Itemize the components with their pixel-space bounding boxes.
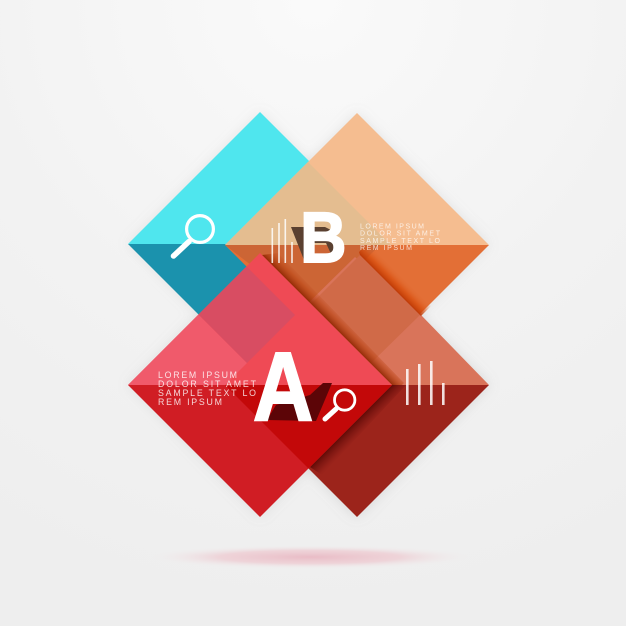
light left facet (128, 314, 247, 385)
floor shadow (145, 545, 475, 569)
panel: orange diamond (225, 113, 489, 377)
panel: dark red diamond (225, 245, 489, 517)
text block: top right: SAMPLE TEXT LO (360, 238, 441, 245)
shadow on upper right (262, 253, 404, 385)
text block: top right: LOREM IPSUM (360, 224, 424, 230)
text block: top right (360, 224, 441, 252)
deep red overlap (225, 385, 392, 468)
panel: cyan diamond (128, 112, 392, 376)
text block: lower left: LOREM IPSUM (158, 370, 237, 380)
letter B shadow (291, 227, 336, 260)
text block: top right: REM IPSUM (360, 245, 412, 252)
icon: bars top (272, 219, 293, 263)
icon: bars lower (406, 361, 445, 405)
panel: red diamond (128, 253, 406, 517)
soft shadows behind diamonds (128, 112, 489, 517)
icon: red magnifier (325, 390, 355, 419)
shadow cast on orange (359, 245, 431, 316)
letter B: B (300, 199, 346, 278)
text block: lower left: SAMPLE TEXT LO (158, 388, 256, 398)
letter A: A (253, 333, 313, 441)
pink overlap with cyan (198, 266, 295, 363)
letter A shadow (267, 383, 332, 421)
text block: lower left: DOLOR SIT AMET (158, 379, 257, 389)
icon: cyan magnifier (174, 216, 213, 256)
text block: top right: DOLOR SIT AMET (360, 231, 441, 238)
red upper half (128, 253, 392, 385)
text block: lower left: REM IPSUM (158, 397, 222, 407)
shadow on lower right (310, 385, 406, 475)
text block: lower left (158, 370, 257, 407)
red lower half (128, 385, 392, 517)
